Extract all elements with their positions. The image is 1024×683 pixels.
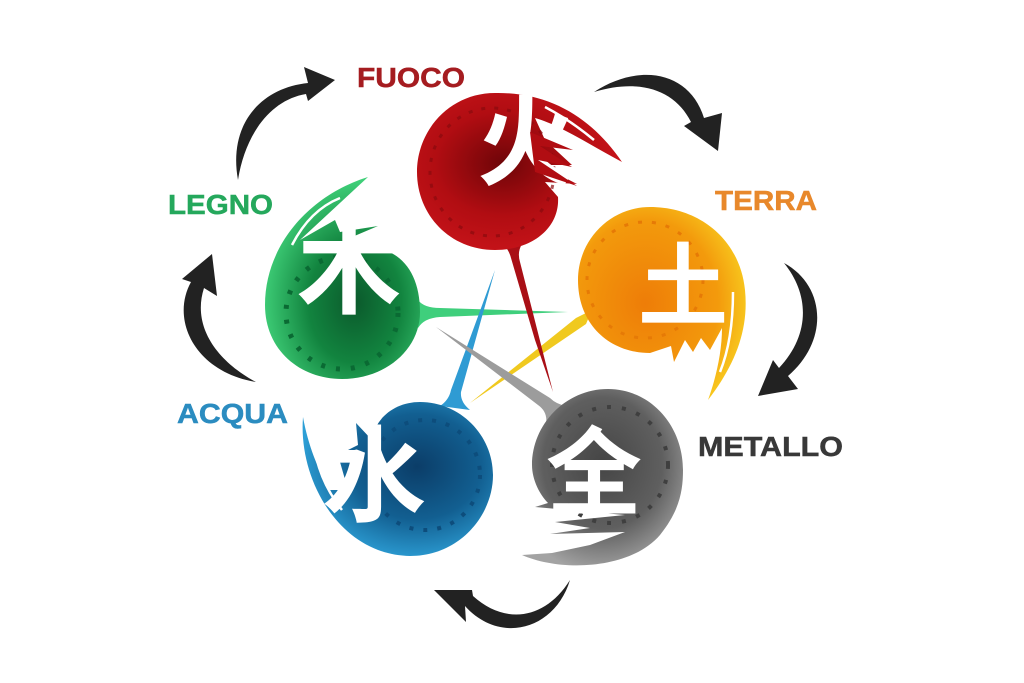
fire bristles: [530, 132, 577, 186]
wood texture rings: [286, 257, 398, 369]
fire brush highlight: [545, 107, 594, 140]
earth texture rings: [587, 222, 703, 338]
label: acqua: ACQUA: [177, 398, 288, 429]
fire kanji: 火: [477, 88, 575, 198]
metal kanji: 全: [546, 421, 642, 528]
stem: fire: [503, 244, 553, 392]
water brush highlight: [313, 440, 342, 510]
label: terra: TERRA: [715, 185, 817, 216]
water kanji: 水: [322, 420, 426, 536]
arrow: fire to earth: [594, 75, 722, 151]
earth kanji: 土: [638, 238, 728, 338]
stem: wood: [418, 300, 568, 328]
element: earth: [578, 207, 746, 400]
stem: water: [440, 270, 495, 410]
arrow: metal to water: [434, 580, 570, 628]
element: wood: [265, 177, 420, 379]
fire texture rings: [430, 108, 554, 236]
arrow: earth to metal: [758, 263, 817, 396]
element: water: [303, 402, 493, 556]
arrow: wood to fire: [236, 67, 335, 180]
wood kanji: 木: [297, 212, 401, 328]
label: fuoco: FUOCO: [357, 62, 465, 93]
earth brush highlight: [720, 292, 733, 372]
element: fire: [417, 88, 622, 250]
label: legno: LEGNO: [168, 189, 273, 220]
label: metallo: METALLO: [698, 431, 843, 462]
arrow: water to wood: [182, 254, 256, 382]
metal texture rings: [552, 407, 668, 523]
wood brush highlight: [292, 198, 340, 245]
water texture rings: [370, 420, 480, 530]
stem: earth: [470, 310, 592, 403]
stem: metal: [436, 327, 566, 424]
element: metal: [522, 389, 683, 565]
